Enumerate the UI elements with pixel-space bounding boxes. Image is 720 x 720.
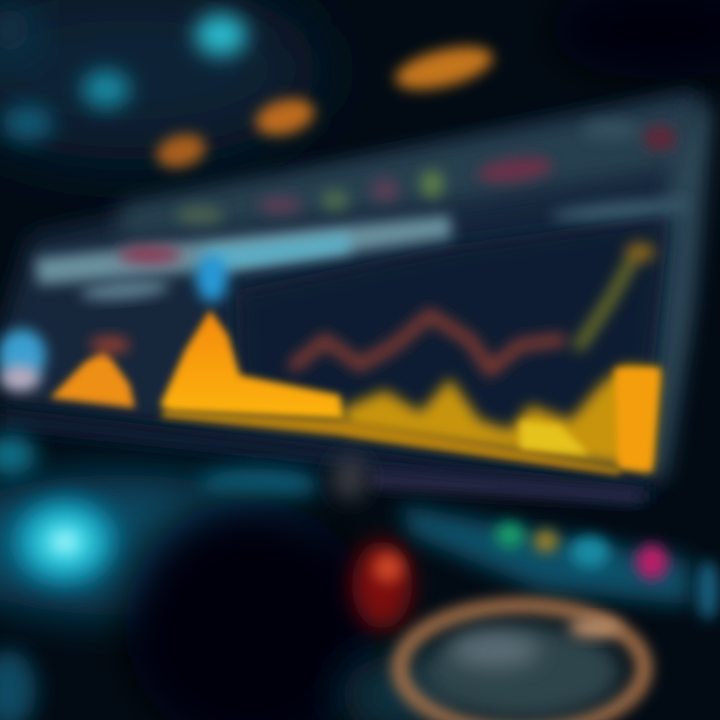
monitor body <box>0 88 712 490</box>
top lights: orange <box>153 38 497 173</box>
chart panel <box>235 215 670 450</box>
toolbar colored tabs <box>118 120 690 264</box>
top lights: cyan <box>0 4 247 141</box>
red object <box>352 541 412 629</box>
header strip <box>35 215 452 303</box>
line chart overlay: red and green <box>295 242 655 370</box>
monitor lower bezel <box>0 408 650 505</box>
keyboard strip with coloured keys <box>400 505 720 620</box>
left screen glow <box>0 329 130 391</box>
orange area chart <box>50 310 660 476</box>
gold coin ring <box>400 606 644 720</box>
desk and mouse <box>0 435 460 720</box>
